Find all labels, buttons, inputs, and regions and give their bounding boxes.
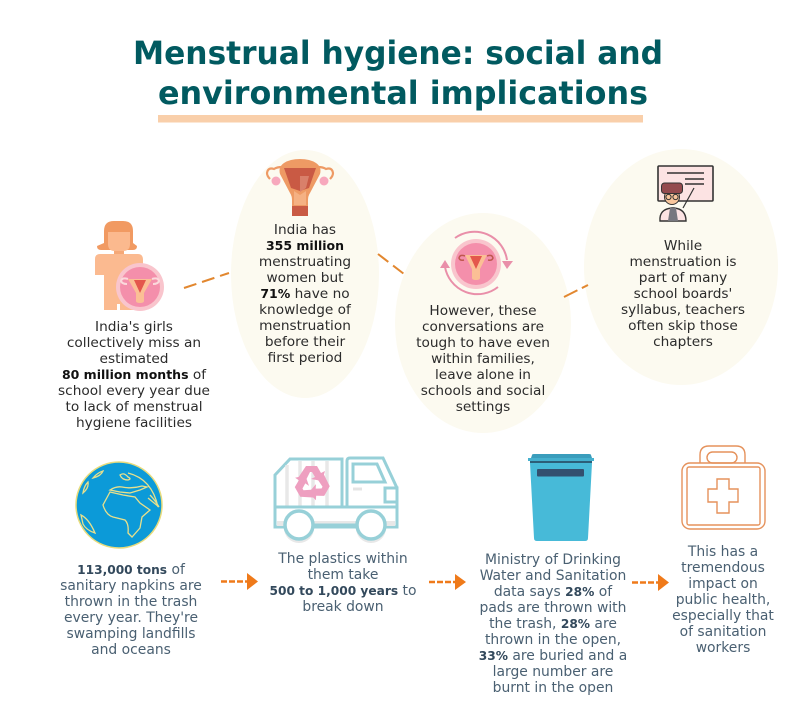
text: school syllabus: school boards' xyxy=(634,286,732,302)
text: public health: tremendous xyxy=(681,560,765,576)
panel: school bubble xyxy=(584,149,778,385)
title: Menstrual hygiene: social and xyxy=(133,34,663,72)
text: knowledge xyxy=(259,222,352,366)
text: girls miss school: India's girls xyxy=(95,319,173,335)
title: environmental implications xyxy=(158,74,648,112)
arrow: ministry to health xyxy=(632,574,669,591)
text: public health: workers xyxy=(696,640,750,656)
text: ministry data: data says 28% of xyxy=(494,584,613,600)
text: tons of napkins xyxy=(60,562,202,658)
icon: recycling truck xyxy=(275,458,397,543)
text: ministry data: pads are thrown with xyxy=(480,600,626,616)
text: school syllabus: syllabus, teachers xyxy=(621,302,745,318)
icon: girl with uterus badge xyxy=(95,221,164,311)
text: knowledge: menstruating xyxy=(259,254,351,270)
text: ministry data: burnt in the open xyxy=(493,680,613,696)
text: knowledge: before their xyxy=(265,334,346,350)
text: tons of napkins: and oceans xyxy=(91,642,171,658)
text: girls miss school: estimated xyxy=(100,351,168,367)
text: girls miss school: hygiene facilities xyxy=(76,415,192,431)
text: family conversations: However, these xyxy=(429,303,537,319)
text: tons of napkins: sanitary napkins are xyxy=(60,578,202,594)
text: ministry data xyxy=(479,552,627,696)
text: ministry data: Ministry of Drinking xyxy=(485,552,621,568)
text: tons of napkins: thrown in the trash xyxy=(65,594,197,610)
icon: teacher at board xyxy=(658,166,713,221)
text: knowledge: India has xyxy=(274,222,336,238)
text: school syllabus xyxy=(621,238,745,350)
text: school syllabus: often skip those xyxy=(628,318,738,334)
connector: family to school xyxy=(564,285,588,297)
text: plastics breakdown: 500 to 1,000 years to xyxy=(270,583,416,599)
text: knowledge: knowledge of xyxy=(259,302,352,318)
text: plastics breakdown: The plastics within xyxy=(277,551,408,567)
icon: uterus cycle xyxy=(440,232,513,294)
text: school syllabus: part of many xyxy=(639,270,727,286)
icon: globe xyxy=(76,462,162,548)
text: public health: impact on xyxy=(688,576,758,592)
arrow: plastics to ministry xyxy=(429,574,466,590)
title underline xyxy=(158,115,643,122)
text: girls miss school xyxy=(58,319,210,431)
icon: first aid kit xyxy=(682,446,765,529)
title xyxy=(133,34,663,112)
text: public health xyxy=(672,544,774,656)
text: public health: This has a xyxy=(687,544,758,560)
text: family conversations: conversations are xyxy=(422,319,544,335)
text: knowledge: 355 million xyxy=(266,238,344,253)
panel: family bubble xyxy=(395,213,571,433)
text: public health: of sanitation xyxy=(680,624,766,640)
text: family conversations: settings xyxy=(456,399,510,415)
text: ministry data: the trash, 28% are xyxy=(489,616,617,632)
icon: uterus xyxy=(267,159,333,216)
icon: trash bin xyxy=(528,454,594,541)
connector: knowledge to family xyxy=(378,254,404,274)
text: plastics breakdown: break down xyxy=(302,599,384,615)
text: plastics breakdown xyxy=(270,551,416,615)
text: girls miss school: collectively miss an xyxy=(67,335,201,351)
text: family conversations: tough to have even xyxy=(416,335,550,351)
text: ministry data: 33% are buried and a xyxy=(479,648,627,664)
text: school syllabus: chapters xyxy=(653,334,713,350)
text: family conversations: schools and social xyxy=(421,383,545,399)
text: knowledge: women but xyxy=(266,270,344,286)
text: girls miss school: to lack of menstrual xyxy=(65,399,203,415)
text: plastics breakdown: them take xyxy=(308,567,378,583)
text: school syllabus: menstruation is xyxy=(629,254,737,270)
text: knowledge: first period xyxy=(268,350,342,366)
text: tons of napkins: swamping landfills xyxy=(66,626,196,642)
text: family conversations: leave alone in xyxy=(435,367,531,383)
text: public health: especially that xyxy=(672,608,774,624)
connector: girl to knowledge xyxy=(184,273,229,288)
text: knowledge: menstruation xyxy=(259,318,351,334)
text: school syllabus: While xyxy=(664,238,702,254)
text: family conversations xyxy=(416,303,550,415)
text: family conversations: within families, xyxy=(431,351,535,367)
text: ministry data: large number are xyxy=(493,664,613,680)
arrow: napkins to plastics xyxy=(221,573,258,590)
panel: knowledge bubble xyxy=(231,150,379,398)
text: tons of napkins: 113,000 tons of xyxy=(77,562,186,578)
text: girls miss school: 80 million months of xyxy=(62,367,207,383)
text: girls miss school: school every year due xyxy=(58,383,210,399)
text: tons of napkins: every year. They're xyxy=(64,610,198,626)
text: ministry data: thrown in the open, xyxy=(485,632,621,648)
text: knowledge: 71% have no xyxy=(260,286,350,302)
text: ministry data: Water and Sanitation xyxy=(480,568,626,584)
text: public health: public health, xyxy=(676,592,770,608)
